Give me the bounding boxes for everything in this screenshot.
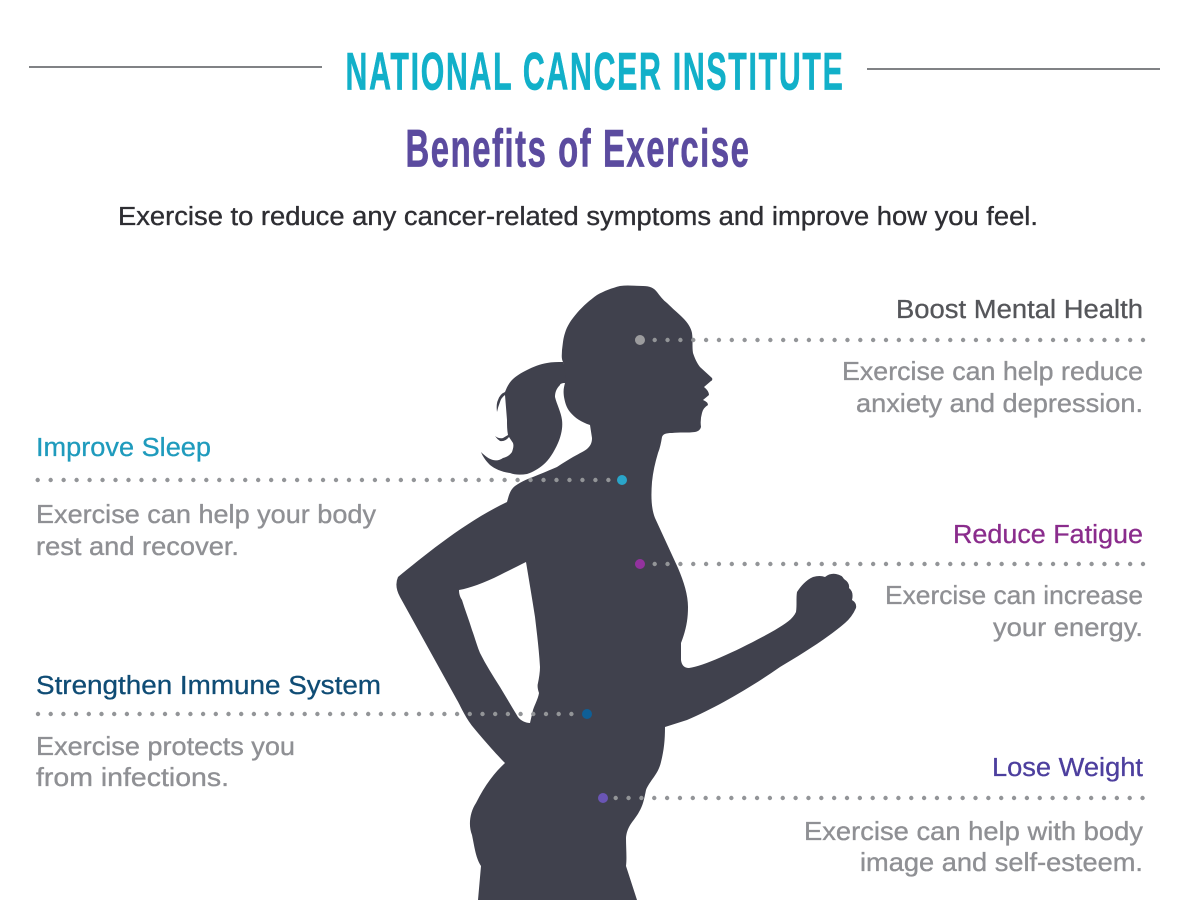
callout: boost mental health bbox=[635, 296, 1145, 418]
runner silhouette bbox=[396, 286, 856, 900]
callout: reduce fatigue: Reduce Fatigue bbox=[953, 521, 1143, 549]
callout: boost mental health: Exercise can help reduce bbox=[842, 356, 1143, 386]
title rule left bbox=[29, 66, 322, 68]
title: NATIONAL CANCER INSTITUTE bbox=[346, 42, 844, 102]
callout: strengthen immune system bbox=[36, 672, 592, 792]
callout: reduce fatigue bbox=[635, 521, 1145, 642]
callout: boost mental health: Boost Mental Health bbox=[896, 296, 1143, 324]
callout: improve sleep: Improve Sleep bbox=[36, 434, 211, 462]
title rule right bbox=[867, 68, 1160, 70]
callout: lose weight bbox=[598, 754, 1145, 877]
callout: lose weight: Lose Weight bbox=[992, 754, 1143, 782]
callout: strengthen immune system: Strengthen Immune System bbox=[36, 672, 381, 700]
callout: strengthen immune system: Exercise protects you bbox=[36, 731, 295, 761]
callout: improve sleep: rest and recover. bbox=[36, 531, 239, 561]
callout: reduce fatigue: your energy. bbox=[993, 612, 1143, 642]
callout: boost mental health: anxiety and depression. bbox=[856, 388, 1143, 418]
callout: lose weight: Exercise can help with body bbox=[804, 816, 1143, 846]
callout: lose weight: image and self-esteem. bbox=[860, 847, 1143, 877]
callout: improve sleep bbox=[36, 434, 627, 561]
heading: Benefits of Exercise bbox=[406, 120, 750, 178]
callout: improve sleep: Exercise can help your body bbox=[36, 499, 376, 529]
intro text: Exercise to reduce any cancer-related symptoms and improve how you feel. bbox=[118, 203, 1038, 231]
callout: strengthen immune system: from infections. bbox=[36, 762, 229, 792]
callout: reduce fatigue: Exercise can increase bbox=[885, 580, 1143, 610]
